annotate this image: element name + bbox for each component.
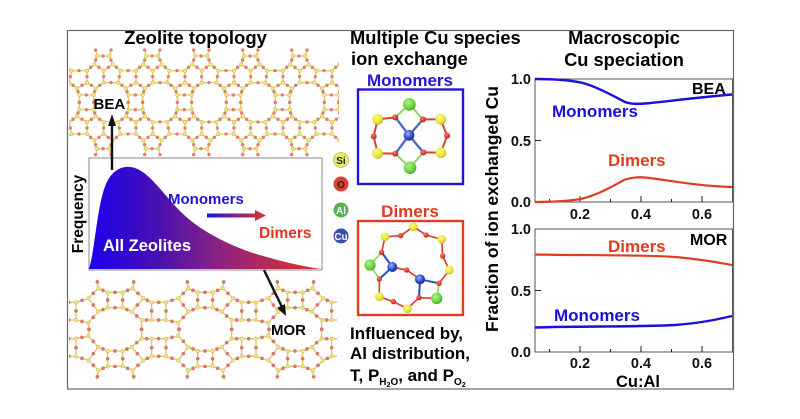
- text block: influences: T, P: [350, 366, 379, 385]
- heading: monomers: Monomers: [367, 71, 453, 90]
- chart: BEA speciation: [511, 72, 732, 223]
- label: MOR panel: MOR: [690, 232, 728, 249]
- text block: influences: Al distribution,: [350, 344, 470, 363]
- x tick labels BEA: 0.2: [570, 207, 590, 223]
- label: dimers BEA: Dimers: [608, 151, 666, 170]
- legend: Al: Al: [336, 206, 346, 217]
- y tick labels MOR: 0.0: [511, 345, 531, 361]
- heading: macroscopic Cu speciation: Macroscopic: [568, 27, 680, 48]
- x tick labels MOR: 0.2: [570, 356, 590, 372]
- distribution curve: [89, 167, 321, 269]
- heading: multiple Cu species: Multiple Cu species: [350, 27, 521, 48]
- label: MOR: MOR: [271, 322, 306, 339]
- title: zeolite topology: Zeolite topology: [124, 27, 268, 48]
- text block: influences: 2: [387, 382, 391, 389]
- text block: influences: 2: [462, 382, 466, 389]
- text block: influences: O: [454, 377, 462, 388]
- panel: dimer structure: [358, 221, 463, 315]
- axis label: frequency: Frequency: [70, 174, 87, 253]
- curve: dimers BEA: [535, 177, 732, 202]
- text block: influences: Influenced by,: [350, 324, 463, 343]
- MOR zeolite lattice: [69, 279, 337, 380]
- legend: Si: Si: [336, 156, 346, 167]
- label: dimers MOR: Dimers: [608, 237, 666, 256]
- label: monomers: Monomers: [168, 191, 244, 208]
- label: BEA: BEA: [94, 96, 125, 113]
- x tick labels BEA: 0.6: [692, 207, 712, 223]
- y tick labels MOR: [511, 222, 531, 361]
- outer frame: [68, 30, 734, 389]
- y tick labels MOR: 0.5: [511, 284, 531, 300]
- text block: influences: , and P: [398, 366, 454, 385]
- text block: influences: H: [379, 377, 387, 388]
- x tick labels MOR: [570, 356, 712, 372]
- y tick labels MOR: 1.0: [511, 222, 531, 238]
- label: monomers BEA: Monomers: [552, 102, 638, 121]
- label: BEA panel: BEA: [692, 81, 726, 98]
- text block: influences: O: [390, 377, 398, 388]
- heading: dimers: Dimers: [381, 202, 439, 221]
- x axis title: Cu:Al: [616, 373, 660, 391]
- BEA zeolite lattice: [69, 48, 339, 156]
- label: all zeolites: All Zeolites: [103, 237, 191, 255]
- panel: frequency distribution: [89, 158, 322, 270]
- arrow: to MOR: [264, 270, 282, 307]
- label: monomers MOR: Monomers: [554, 306, 640, 325]
- x tick labels BEA: 0.4: [631, 207, 651, 223]
- y tick labels BEA: 1.0: [511, 72, 531, 88]
- x ticks MOR: [535, 290, 702, 352]
- curve: dimers MOR: [535, 254, 732, 265]
- y tick labels BEA: 0.0: [511, 195, 531, 211]
- legend: atom types: [334, 152, 348, 244]
- x tick labels BEA: [570, 207, 712, 223]
- y tick labels BEA: 0.5: [511, 134, 531, 150]
- curve: monomers MOR: [535, 316, 732, 328]
- y tick labels BEA: [511, 72, 531, 211]
- heading: multiple Cu species: ion exchange: [351, 48, 468, 69]
- arrow: to BEA: [108, 114, 116, 170]
- panel: monomer structure: [358, 90, 463, 184]
- arrow head: MOR: [277, 304, 286, 316]
- x tick labels MOR: 0.4: [631, 356, 651, 372]
- legend: O: O: [337, 180, 345, 191]
- heading: macroscopic Cu speciation: Cu speciation: [564, 49, 684, 70]
- chart: MOR speciation: [511, 222, 732, 372]
- curve: monomers BEA: [535, 79, 732, 104]
- arrow: monomers to dimers: [207, 210, 266, 221]
- label: dimers: Dimers: [259, 225, 312, 242]
- y axis title: Fraction of ion exchanged Cu: [482, 86, 502, 332]
- x ticks BEA: [535, 140, 702, 202]
- x tick labels MOR: 0.6: [692, 356, 712, 372]
- legend: Cu: Cu: [334, 232, 348, 243]
